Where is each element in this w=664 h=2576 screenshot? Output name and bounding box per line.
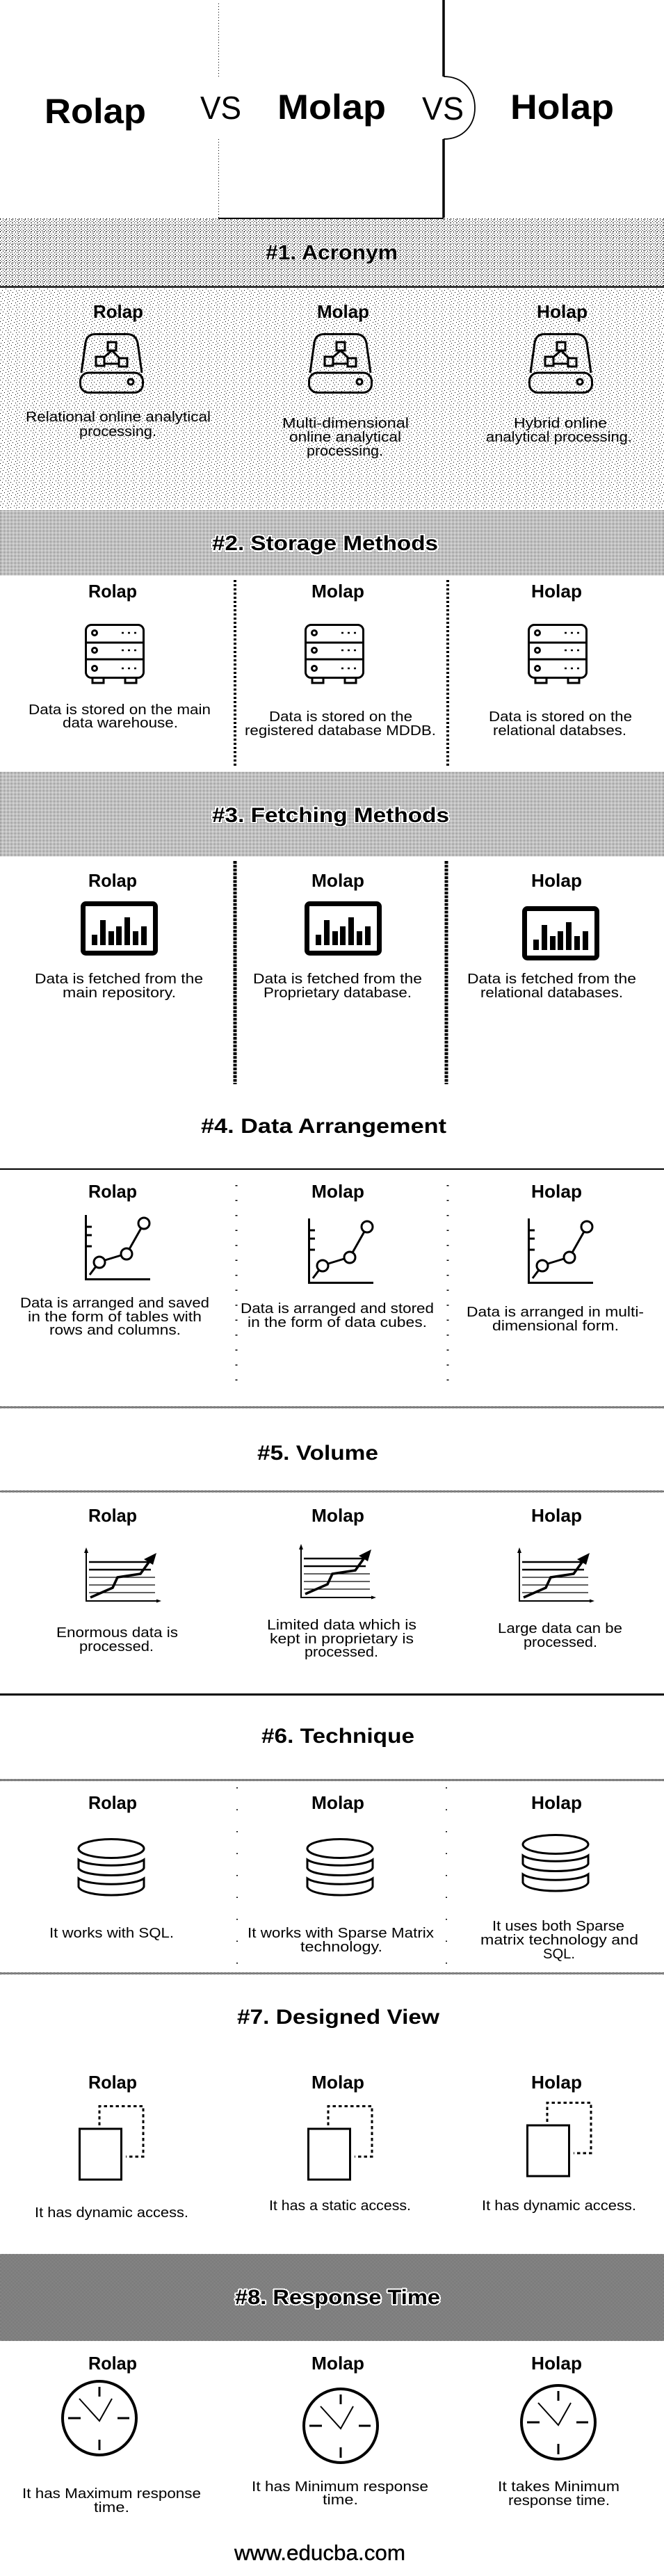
- description: in the form of data cubes.: [248, 1314, 427, 1330]
- description: SQL.: [543, 1946, 575, 1962]
- panel: volume: [0, 1442, 664, 1660]
- icon: clock: [63, 2381, 136, 2455]
- description: rows and columns.: [49, 1322, 181, 1338]
- column label: Molap: [311, 2353, 364, 2374]
- icon: growth chart: [517, 1547, 594, 1602]
- column label: Rolap: [88, 2072, 137, 2093]
- description: Hybrid online: [514, 415, 607, 431]
- icon: storage drive: [530, 334, 592, 392]
- column: Holap: [467, 870, 636, 1001]
- column dividers: [235, 861, 446, 1084]
- column: Rolap: [26, 301, 211, 440]
- description: [248, 1925, 435, 1955]
- column: Rolap: [22, 2353, 201, 2515]
- icon: growth chart: [84, 1547, 161, 1602]
- description: It has Minimum response: [252, 2479, 428, 2495]
- description: time.: [323, 2492, 358, 2508]
- column label: Holap: [531, 1181, 582, 1202]
- icon: database stack: [523, 1835, 588, 1891]
- description: processed.: [524, 1634, 597, 1650]
- icon: clock: [304, 2389, 378, 2463]
- description: [26, 409, 211, 440]
- column: Holap: [498, 2353, 620, 2509]
- column label: Molap: [317, 301, 369, 322]
- column label: Rolap: [88, 2353, 137, 2374]
- description: main repository.: [63, 985, 176, 1001]
- description: Enormous data is: [56, 1625, 178, 1641]
- heading: Technique: #6. Technique: [261, 1725, 414, 1748]
- description: Large data can be: [498, 1620, 622, 1636]
- column: Molap: [253, 870, 422, 1001]
- column: Rolap: [56, 1505, 178, 1655]
- description: processing.: [79, 424, 156, 440]
- description: [467, 971, 636, 1001]
- icon: database stack: [307, 1839, 373, 1895]
- heading: Data Arrangement: #4. Data Arrangement: [201, 1115, 446, 1138]
- heading: Volume: #5. Volume: [257, 1442, 378, 1465]
- icon: bar chart screen: [524, 908, 597, 958]
- description: It has Maximum response: [22, 2486, 201, 2502]
- column: Molap: [252, 2353, 428, 2508]
- description: [267, 1617, 416, 1660]
- column: Molap: [241, 1181, 434, 1330]
- description: [467, 1304, 644, 1334]
- column label: Molap: [311, 581, 364, 602]
- panel: data arrangement: [0, 1115, 664, 1391]
- icon: server rack: [306, 625, 363, 683]
- column: Rolap: [49, 1792, 174, 1941]
- description: in the form of tables with: [28, 1309, 202, 1325]
- description: dimensional form.: [492, 1318, 619, 1334]
- column label: Holap: [537, 301, 588, 322]
- icon: database stack: [79, 1839, 144, 1895]
- description: Data is fetched from the: [35, 971, 203, 987]
- title header: [44, 0, 614, 218]
- description: [480, 1918, 638, 1962]
- column label: Molap: [311, 870, 364, 891]
- column: Molap: [282, 301, 409, 459]
- column label: Holap: [531, 2353, 582, 2374]
- heading: Designed View: #7. Designed View: [237, 2006, 440, 2029]
- body dither background: [0, 289, 664, 509]
- icon: storage drive: [81, 334, 143, 392]
- description: Data is stored on the: [269, 709, 412, 725]
- description: processed.: [79, 1639, 154, 1655]
- divider with vs bulge: [442, 0, 445, 77]
- description: analytical processing.: [486, 429, 632, 445]
- description: [489, 709, 632, 739]
- description: [35, 971, 203, 1001]
- column label: Molap: [311, 1181, 364, 1202]
- description: technology.: [300, 1939, 382, 1955]
- column: Molap: [267, 1505, 416, 1660]
- column label: Rolap: [88, 1505, 137, 1526]
- column: Holap: [486, 301, 632, 445]
- band: fetching header: [0, 772, 664, 857]
- description: [486, 415, 632, 445]
- icon: bar chart screen: [83, 904, 156, 953]
- icon: line chart: [528, 1218, 593, 1282]
- description: Data is fetched from the: [253, 971, 422, 987]
- column label: Rolap: [88, 581, 137, 602]
- column label: Holap: [531, 870, 582, 891]
- vs label 1: VS: [200, 90, 241, 126]
- description: Proprietary database.: [264, 985, 412, 1001]
- column label: Rolap: [88, 870, 137, 891]
- description: time.: [94, 2499, 129, 2515]
- band: response time header: [0, 2254, 664, 2341]
- icon: solid and dashed pages: [79, 2106, 143, 2180]
- description: matrix technology and: [480, 1932, 638, 1948]
- description: [498, 2479, 620, 2509]
- column: Molap: [269, 2072, 411, 2214]
- column dividers: [237, 1787, 446, 1968]
- description: Data is arranged and stored: [241, 1301, 434, 1317]
- description: Multi-dimensional: [282, 415, 409, 431]
- column: Rolap: [35, 2072, 188, 2221]
- column dividers: [235, 580, 448, 768]
- icon: solid and dashed pages: [527, 2103, 591, 2176]
- description: Relational online analytical: [26, 409, 211, 425]
- column label: Rolap: [93, 301, 143, 322]
- column: Holap: [480, 1792, 638, 1962]
- description: It takes Minimum: [498, 2479, 620, 2495]
- dotted divider left: [218, 3, 220, 218]
- description: [252, 2479, 428, 2508]
- title: Rolap: Rolap: [44, 92, 146, 131]
- description: [20, 1295, 209, 1338]
- column label: Holap: [531, 1505, 582, 1526]
- title: Holap: Holap: [510, 88, 614, 127]
- heading: Acronym: #1. Acronym: [266, 241, 398, 264]
- column: Molap: [245, 581, 436, 739]
- heading: Fetching Methods: #3. Fetching Methods: [212, 804, 449, 827]
- column: Holap: [467, 1181, 644, 1334]
- icon: bar chart screen: [307, 904, 380, 953]
- heading: Storage Methods: #2. Storage Methods: [212, 532, 438, 555]
- description: It works with SQL.: [49, 1925, 174, 1941]
- column label: Holap: [531, 1792, 582, 1813]
- column: Holap: [498, 1505, 622, 1650]
- icon: server rack: [86, 625, 143, 683]
- column label: Rolap: [88, 1181, 137, 1202]
- description: It has a static access.: [269, 2198, 411, 2214]
- panel: storage methods: [0, 510, 664, 768]
- column: Rolap: [29, 581, 211, 731]
- description: It works with Sparse Matrix: [248, 1925, 435, 1941]
- description: It uses both Sparse: [492, 1918, 624, 1934]
- description: processed.: [305, 1644, 378, 1660]
- column label: Molap: [311, 1505, 364, 1526]
- description: [56, 1625, 178, 1655]
- panel: designed view: [35, 2006, 636, 2221]
- icon: server rack: [528, 625, 587, 683]
- icon: growth chart: [299, 1544, 376, 1600]
- icon: clock: [521, 2385, 595, 2459]
- band: storage header: [0, 510, 664, 575]
- description: Data is stored on the: [489, 709, 632, 725]
- column label: Holap: [531, 2072, 582, 2093]
- icon: line chart: [86, 1215, 150, 1280]
- icon: storage drive: [309, 334, 371, 392]
- column: Holap: [482, 2072, 636, 2214]
- column label: Molap: [311, 2072, 364, 2093]
- description: Data is arranged and saved: [20, 1295, 209, 1311]
- description: [245, 709, 436, 739]
- vs label 2: VS: [422, 90, 464, 127]
- description: relational databases.: [480, 985, 623, 1001]
- panel: technique: [0, 1725, 664, 1968]
- description: processing.: [307, 443, 383, 459]
- panel: fetching methods: [0, 772, 664, 1084]
- description: Limited data which is: [267, 1617, 416, 1633]
- description: [22, 2486, 201, 2515]
- description: [29, 702, 211, 731]
- description: Data is arranged in multi-: [467, 1304, 644, 1320]
- description: [282, 415, 409, 459]
- description: response time.: [508, 2493, 610, 2509]
- description: Data is stored on the main: [29, 702, 211, 718]
- footer: website: www.educba.com: [234, 2541, 405, 2565]
- column label: Molap: [311, 1792, 364, 1813]
- column: Molap: [248, 1792, 435, 1955]
- column dividers: [236, 1185, 448, 1391]
- column label: Holap: [531, 581, 582, 602]
- icon: line chart: [309, 1218, 373, 1282]
- description: It has dynamic access.: [482, 2198, 636, 2214]
- description: It has dynamic access.: [35, 2205, 188, 2221]
- description: relational databses.: [493, 723, 626, 739]
- icon: solid and dashed pages: [309, 2106, 372, 2180]
- description: Data is fetched from the: [467, 971, 636, 987]
- column label: Rolap: [88, 1792, 137, 1813]
- description: [241, 1301, 434, 1330]
- panel: response time: [0, 2254, 664, 2515]
- heading: Response Time: #8. Response Time: [235, 2286, 440, 2309]
- description: [498, 1620, 622, 1650]
- column: Holap: [489, 581, 632, 739]
- description: registered database MDDB.: [245, 723, 436, 739]
- description: data warehouse.: [63, 715, 178, 731]
- band: acronym header: [0, 218, 664, 287]
- column: Rolap: [20, 1181, 209, 1338]
- title: Molap: Molap: [277, 88, 386, 127]
- description: online analytical: [289, 429, 401, 445]
- description: [253, 971, 422, 1001]
- panel: acronym: [0, 218, 664, 509]
- description: kept in proprietary is: [270, 1631, 414, 1647]
- column: Rolap: [35, 870, 203, 1001]
